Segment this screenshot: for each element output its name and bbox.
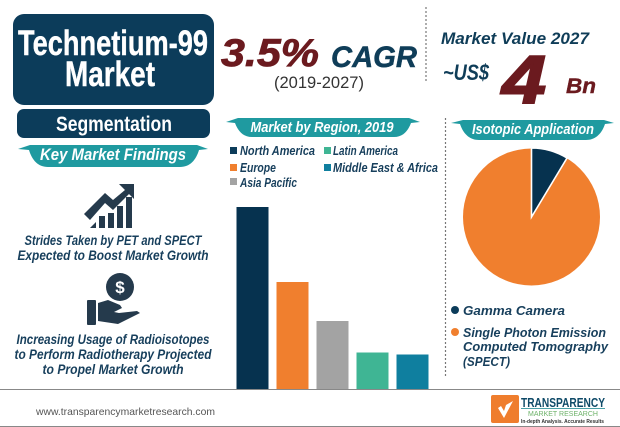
text: radioisotopes finding: to Perform Radiotherapy Projected [14,347,212,362]
legend: SPECT: Single Photon Emission [463,325,606,340]
text: radioisotopes finding: to Propel Market Growth [42,362,184,377]
title panel [13,14,214,105]
legend: regions: Asia Pacific [239,175,298,190]
icon: growth chart with arrow [84,184,134,228]
icon: hand holding dollar coin [87,273,140,325]
icon: hand holding dollar coin: $ [115,278,125,297]
ribbon: key market findings: Key Market Findings [40,145,186,164]
legend: regions: North America [240,143,315,158]
logo: transparency market research: In-depth Analysis. Accurate Results [521,419,604,425]
legend: regions: Europe [240,160,276,175]
title panel: Technetium-99 [18,24,208,63]
CAGR stat [221,32,417,92]
legend: SPECT [451,325,609,369]
text: strides finding [18,233,208,263]
CAGR stat: 3.5% [221,32,319,75]
text: radioisotopes finding [14,332,212,377]
logo: transparency market research [491,395,605,425]
market value stat: ~US$ [443,60,490,85]
legend: SPECT: (SPECT) [463,354,510,369]
CAGR stat: (2019-2027) [274,73,364,92]
market value stat [441,29,596,118]
ribbon: market by region: Market by Region, 2019 [250,119,394,136]
legend: SPECT: Computed Tomography [463,339,609,354]
website URL: www.transparencymarketresearch.com [35,406,215,418]
legend: regions [230,143,438,190]
segmentation heading [17,109,210,138]
bar chart: market by region [236,207,428,389]
market value stat: 4 [500,42,546,118]
logo: transparency market research: MARKET RESEARCH [528,409,598,418]
segmentation heading: Segmentation [56,113,172,136]
text: strides finding: Strides Taken by PET and SPECT [24,233,203,248]
legend: gamma camera: Gamma Camera [463,303,565,318]
CAGR stat: CAGR [331,41,417,74]
legend: regions: Latin America [333,143,398,158]
market value stat: Bn [566,75,596,98]
text: strides finding: Expected to Boost Market Growth [18,248,208,263]
market value stat: Market Value 2027 [441,29,591,48]
pie chart: isotopic application [463,148,600,286]
title panel: Market [65,55,155,94]
text: radioisotopes finding: Increasing Usage of Radioisotopes [16,332,210,347]
ribbon: isotopic application: Isotopic Application [472,121,594,138]
legend: regions: Middle East & Africa [333,160,438,175]
